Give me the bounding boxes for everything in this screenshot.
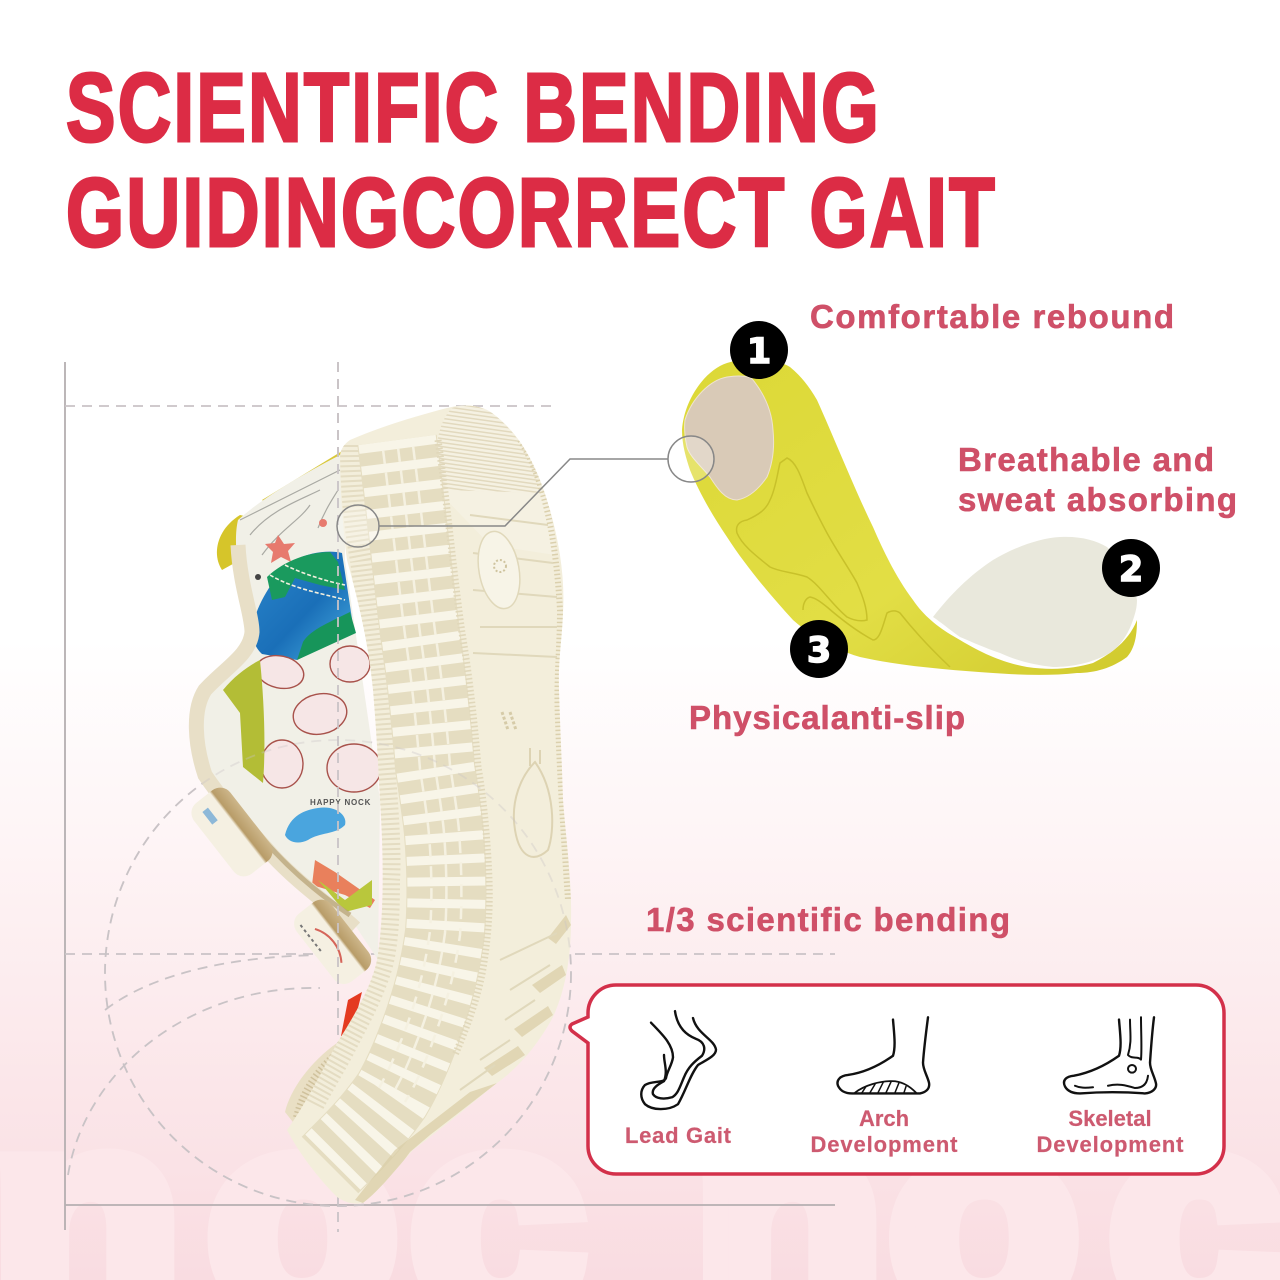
print: happy nock text: HAPPY NOCK xyxy=(310,798,371,807)
right rim ribs xyxy=(438,440,489,1055)
title: GUIDINGCORRECT GAIT xyxy=(66,158,997,267)
callout box xyxy=(570,985,1224,1174)
engraved mark xyxy=(502,712,516,730)
forefoot pad xyxy=(685,376,774,500)
leader line xyxy=(379,459,668,526)
caption: lead gait: Lead Gait xyxy=(625,1123,732,1148)
lower wedge shadows xyxy=(355,915,571,1203)
caption: arch development: Development xyxy=(810,1132,958,1157)
marker 2: 2 xyxy=(1119,550,1143,590)
caption: skeletal development xyxy=(1036,1106,1184,1157)
heel lining xyxy=(933,537,1137,667)
print: globe xyxy=(252,552,354,660)
marker 3: 3 xyxy=(807,631,831,671)
engraved bear xyxy=(514,748,552,857)
sole details clipped to outline xyxy=(312,406,571,1203)
icon: skeletal xyxy=(1064,1017,1156,1093)
toe cap xyxy=(285,1043,345,1126)
print: eggs xyxy=(253,646,381,792)
shoe xyxy=(188,362,571,1204)
icon: lead gait xyxy=(641,1011,716,1109)
caption: arch development: Arch xyxy=(859,1106,909,1131)
insole body xyxy=(682,359,1137,675)
heel ribs xyxy=(437,406,543,493)
label: comfortable rebound: Comfortable rebound xyxy=(810,298,1174,335)
button two xyxy=(289,894,376,989)
tread columns xyxy=(379,438,461,1102)
label: breathable and sweat absorbing: Breathable and xyxy=(958,441,1214,478)
faint centre guide over fabric xyxy=(337,362,339,1000)
print: green figure xyxy=(223,660,264,783)
print: clouds xyxy=(285,807,345,842)
construction guides xyxy=(65,362,835,1232)
heel badge xyxy=(473,528,525,612)
print: orange figure xyxy=(312,860,375,908)
marker 3 xyxy=(790,620,848,678)
shoe upper xyxy=(186,448,381,1126)
caption: arch development xyxy=(810,1106,958,1157)
label: breathable and sweat absorbing: sweat absorbing xyxy=(958,481,1237,518)
strap xyxy=(196,545,355,928)
tread base xyxy=(330,440,446,1165)
outsole xyxy=(287,405,571,1204)
title xyxy=(66,53,997,267)
magnifier on sole xyxy=(337,505,379,547)
label: breathable and sweat absorbing xyxy=(958,441,1237,518)
marker 2 xyxy=(1102,539,1160,597)
marker 1 xyxy=(730,321,788,379)
icon: arch xyxy=(837,1017,929,1093)
arch steps xyxy=(460,515,557,1090)
print: comets and star xyxy=(240,470,340,555)
button one xyxy=(186,782,278,882)
grooves xyxy=(737,458,950,667)
label: physical anti-slip: Physicalanti-slip xyxy=(689,699,965,736)
caption: skeletal development: Development xyxy=(1036,1132,1184,1157)
faint circle over sole xyxy=(105,740,571,1206)
caption: skeletal development: Skeletal xyxy=(1068,1106,1152,1131)
label: one third scientific bending: 1/3 scientific bending xyxy=(646,901,1010,938)
title: SCIENTIFIC BENDING xyxy=(66,53,881,162)
magnifier on insole xyxy=(668,436,714,482)
insole xyxy=(668,359,1137,675)
marker 1: 1 xyxy=(747,332,771,372)
red patch xyxy=(341,992,362,1040)
left rim ribs xyxy=(312,445,389,1105)
right edge ribs xyxy=(520,440,568,900)
tread rungs xyxy=(330,440,446,1165)
